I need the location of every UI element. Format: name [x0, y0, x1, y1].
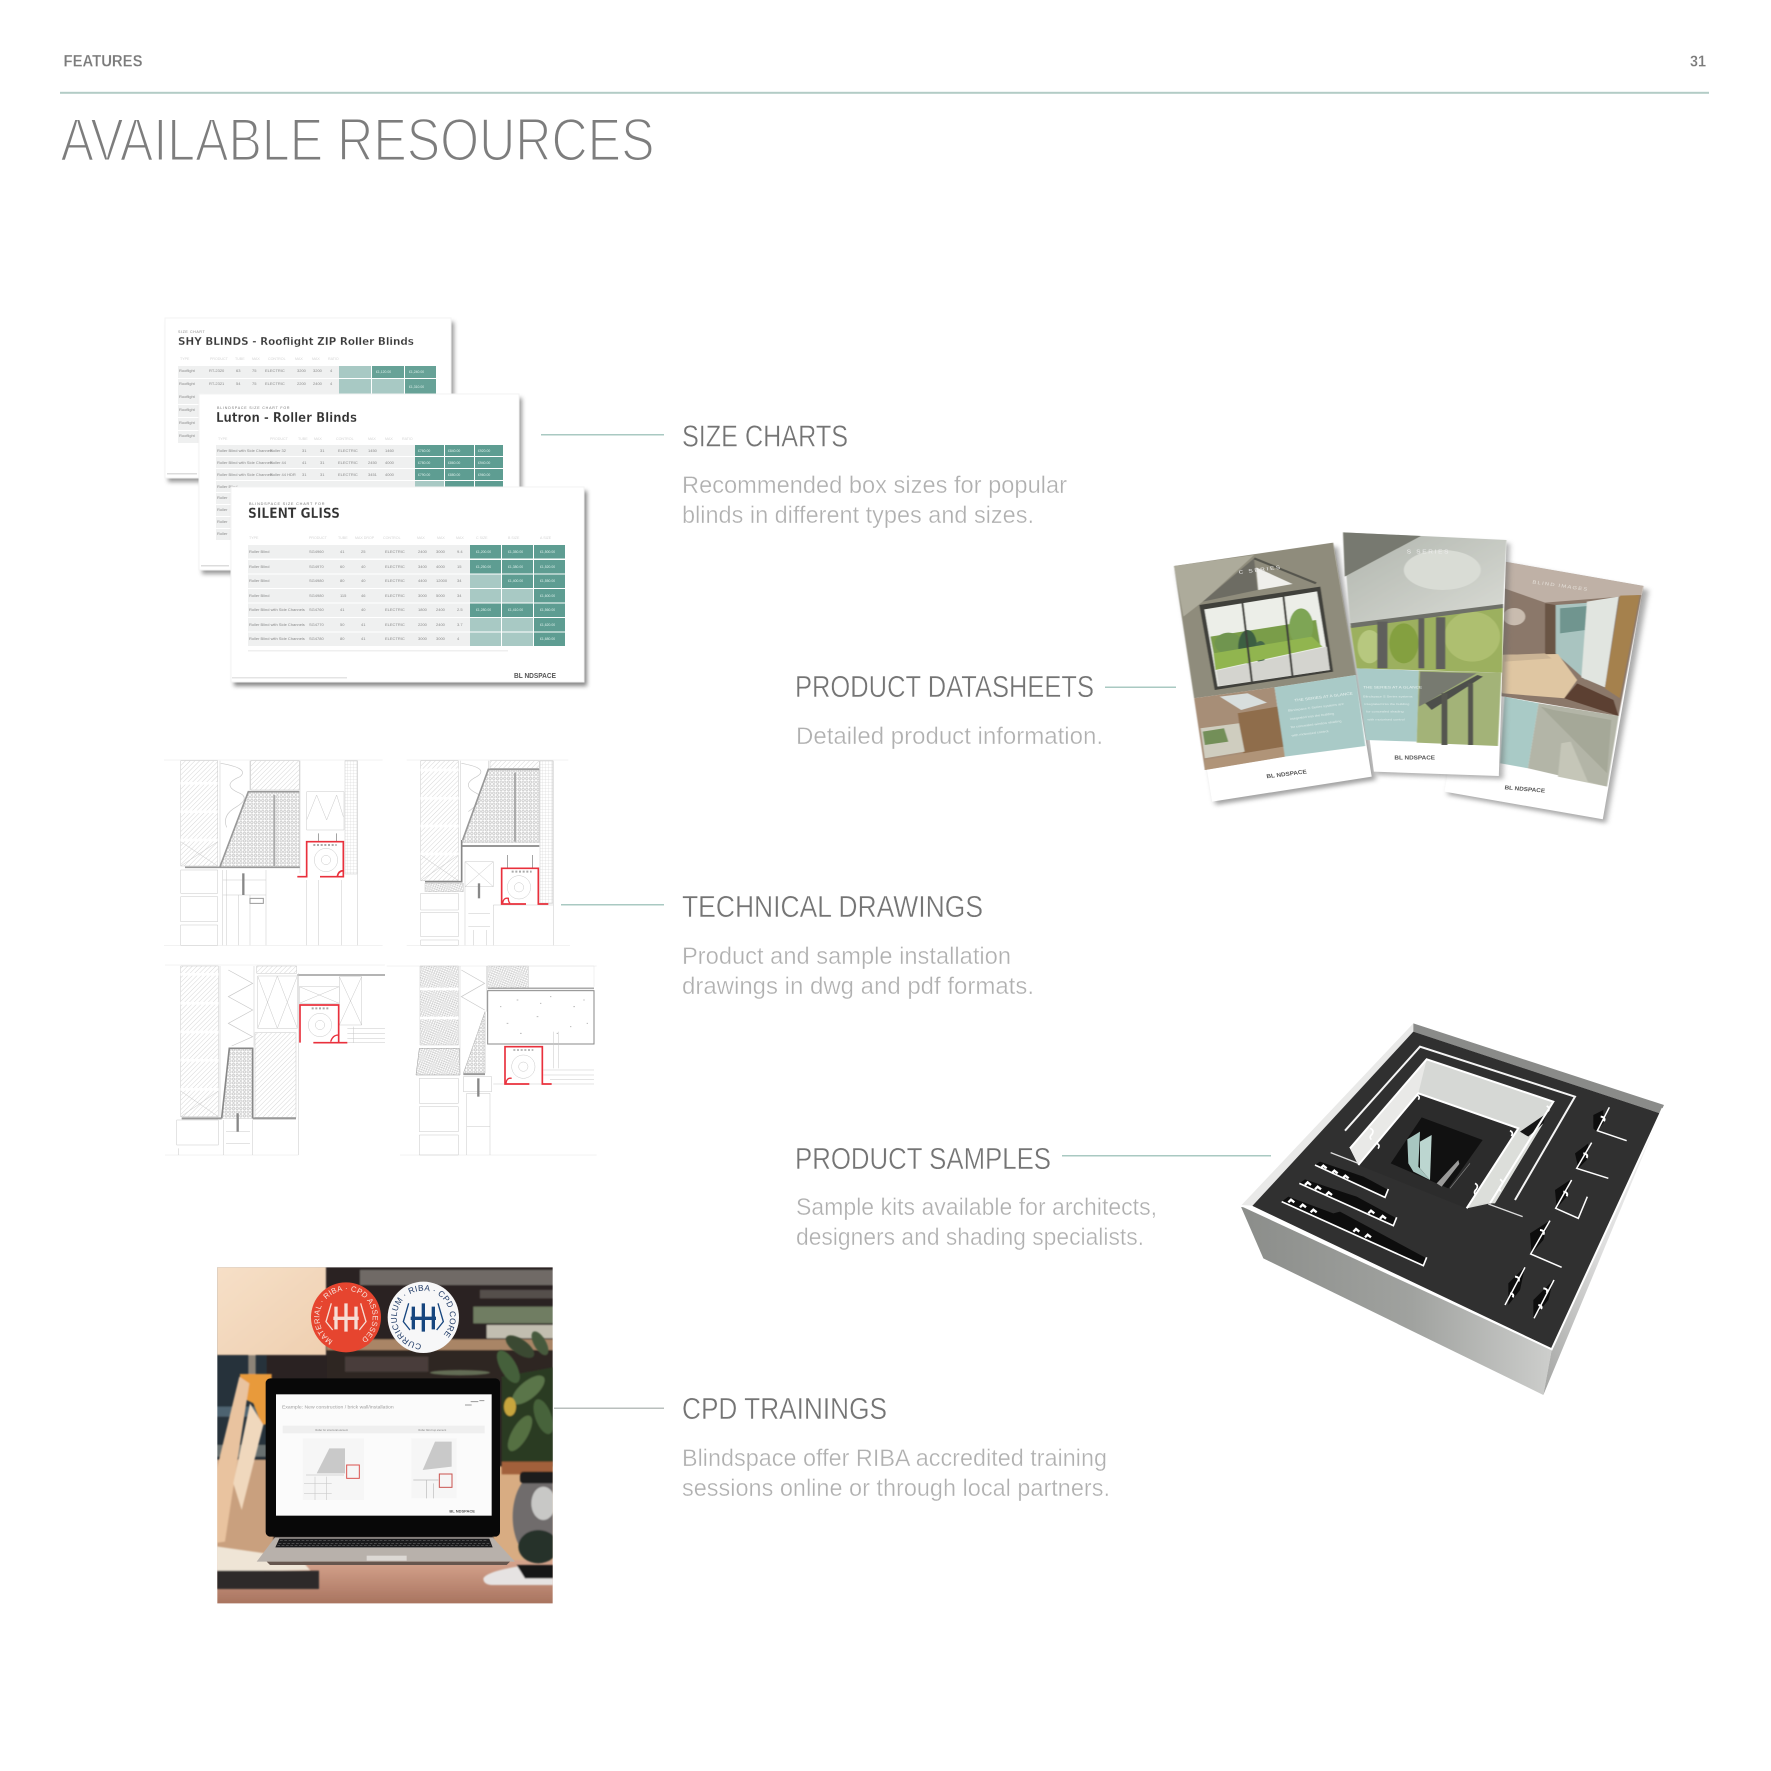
- callout: size charts: SIZE CHARTS: [682, 420, 848, 454]
- datasheet: C series: for concealed window shading: [1290, 719, 1342, 729]
- chart sheet: Silent Gliss: £1,520.00: [540, 565, 555, 569]
- chart sheet: Silent Gliss: C SIZE: [476, 536, 488, 540]
- chart sheet: Lutron: RATIO: [402, 437, 413, 441]
- laptop: BL NDSPACE: [449, 1509, 475, 1514]
- datasheet: S series: THE SERIES AT A GLANCE: [1363, 685, 1422, 689]
- chart sheet: Shy Blinds: PRODUCT: [210, 357, 229, 361]
- chart sheet: Silent Gliss: 2400: [436, 607, 446, 612]
- chart sheet: Silent Gliss: 4: [457, 636, 460, 641]
- chart sheet: Silent Gliss: SG4970: [309, 564, 324, 569]
- chart sheet: Lutron: MAX: [314, 437, 322, 441]
- chart sheet: Silent Gliss: 25: [361, 549, 366, 554]
- callout: CPD trainings: sessions online or through local partners.: [682, 1475, 1110, 1502]
- chart sheet: Silent Gliss: 3.7: [457, 622, 463, 627]
- chart sheet: Silent Gliss: 40: [361, 607, 366, 612]
- chart sheet: Silent Gliss: 3400: [418, 564, 428, 569]
- chart sheet: Silent Gliss: Roller Blind: [249, 564, 269, 569]
- chart sheet: Shy Blinds: CONTROL: [268, 357, 286, 361]
- callout: CPD trainings: [682, 1393, 1110, 1502]
- chart sheet: Lutron: MAX: [368, 437, 376, 441]
- chart sheet: Lutron: ELECTRIC: [338, 472, 358, 477]
- callout: product datasheets: PRODUCT DATASHEETS: [795, 671, 1094, 704]
- chart sheet: Shy Blinds: Rooflight: [179, 420, 196, 425]
- chart sheet: Silent Gliss: 46: [361, 593, 366, 598]
- chart sheet: Silent Gliss: ELECTRIC: [385, 549, 405, 554]
- drawing 1: lintel detail: [164, 760, 383, 945]
- chart sheet: Silent Gliss: ELECTRIC: [385, 564, 405, 569]
- chart sheet: Shy Blinds: 4: [330, 381, 333, 386]
- callout: size charts: Recommended box sizes for popular: [682, 472, 1067, 499]
- chart sheet: Lutron: PRODUCT: [270, 437, 289, 441]
- chart sheet: Lutron: ELECTRIC: [338, 448, 358, 453]
- chart sheet: Shy Blinds: SIZE CHART: [178, 330, 206, 334]
- datasheet: C series: integrated into the building: [1289, 712, 1335, 721]
- callout: technical drawings: drawings in dwg and pdf formats.: [682, 973, 1034, 1000]
- chart sheet: Shy Blinds: TUBE: [235, 357, 245, 361]
- technical drawings group: [164, 760, 597, 1155]
- datasheet: blinds sheet back: BL NDSPACE: [1504, 785, 1546, 794]
- chart sheet: Lutron: Roller 32: [270, 448, 287, 453]
- datasheet: blinds sheet back: BLIND IMAGES: [1532, 580, 1588, 593]
- plant and vase: [430, 1330, 553, 1586]
- chart sheet: Lutron: 4000: [385, 472, 395, 477]
- chart sheet: Silent Gliss: £1,250.00: [476, 565, 491, 569]
- chart sheet: Silent Gliss: 2.5: [457, 607, 463, 612]
- chart sheet: Lutron: Roller: [217, 495, 228, 500]
- chart sheet: Lutron: MAX: [385, 437, 393, 441]
- chart sheet: Silent Gliss: SG4760: [309, 607, 324, 612]
- chart sheet: Silent Gliss: Roller Blind with Side Channels: [249, 636, 305, 641]
- chart sheet: Silent Gliss: SILENT GLISS: [248, 506, 340, 522]
- photo background: [213, 1263, 557, 1607]
- chart sheet: Lutron: 31: [320, 472, 325, 477]
- chart sheet: Lutron: 1450: [368, 448, 378, 453]
- chart sheet: Lutron: Roller: [217, 507, 228, 512]
- chart sheet: Silent Gliss: SG4770: [309, 622, 324, 627]
- chart sheet: Silent Gliss: 80: [340, 578, 345, 583]
- chart sheet: Lutron: £840.00: [448, 449, 460, 453]
- chart sheet: Silent Gliss: 5000: [436, 593, 446, 598]
- chart sheet: Silent Gliss: ELECTRIC: [385, 607, 405, 612]
- callout: technical drawings: TECHNICAL DRAWINGS: [682, 891, 983, 924]
- chart sheet: Silent Gliss: 40: [361, 578, 366, 583]
- chart sheet: Silent Gliss: [231, 487, 587, 686]
- laptop: [257, 1378, 515, 1565]
- chart sheet: Shy Blinds: 3200: [297, 368, 307, 373]
- CPD training photo: [217, 1267, 553, 1604]
- small corner profiles: [1505, 1107, 1627, 1318]
- chart sheet: Shy Blinds: £1,120.00: [376, 370, 391, 374]
- long comb profiles: [1282, 1162, 1427, 1266]
- chart sheet: Lutron: Roller Blind with Side Channels: [217, 448, 273, 453]
- chart sheet: Silent Gliss: 3000: [436, 549, 446, 554]
- chart sheet: Shy Blinds: 75: [252, 368, 257, 373]
- chart sheet: Shy Blinds: 54: [236, 381, 241, 386]
- chart sheet: Silent Gliss: 34: [457, 593, 462, 598]
- chart sheet: Shy Blinds: ELECTRIC: [265, 368, 285, 373]
- chart sheet: Lutron: ELECTRIC: [338, 460, 358, 465]
- datasheet: S series: S SERIES: [1407, 550, 1450, 555]
- chart sheet: Silent Gliss: £1,380.00: [508, 565, 523, 569]
- chart sheet: Lutron: £760.00: [418, 449, 430, 453]
- chart sheet: Shy Blinds: 2200: [297, 381, 307, 386]
- chart sheet: Lutron: Roller 44: [270, 460, 287, 465]
- chart sheet: Shy Blinds: Rooflight: [179, 433, 196, 438]
- drawing 3: head detail: [165, 965, 385, 1155]
- chart sheet: Lutron: £790.00: [418, 473, 430, 477]
- chart sheet: Silent Gliss: 3000: [436, 636, 446, 641]
- datasheet: C series: with motorised control: [1291, 729, 1329, 737]
- chart sheet: Shy Blinds: MAX: [252, 357, 260, 361]
- chart sheet: Silent Gliss: 2200: [418, 622, 428, 627]
- chart sheet: Lutron: 41: [302, 460, 307, 465]
- chart sheet: Lutron: TUBE: [298, 437, 308, 441]
- foam tray: [1252, 1032, 1660, 1348]
- chart sheet: Silent Gliss: PRODUCT: [309, 536, 328, 540]
- callout: product samples: [795, 1143, 1157, 1251]
- panel: size charts stack: [165, 318, 587, 686]
- chart sheet: Lutron: £960.00: [478, 473, 490, 477]
- chart sheet: Silent Gliss: 34: [457, 578, 462, 583]
- chart sheet: Silent Gliss: Roller Blind with Side Channels: [249, 622, 305, 627]
- chart sheet: Lutron: £880.00: [448, 473, 460, 477]
- callout: size charts: blinds in different types and sizes.: [682, 502, 1034, 529]
- datasheet: S series: integrated into the building: [1364, 702, 1410, 706]
- laptop: Roller blind top element: [418, 1428, 446, 1432]
- chart sheet: Lutron: Roller Blind with Side Channels: [217, 472, 273, 477]
- chart sheet: Silent Gliss: 1800: [418, 607, 428, 612]
- chart sheet: Lutron: 4000: [385, 460, 395, 465]
- chart sheet: Silent Gliss: £1,200.00: [476, 550, 491, 554]
- chart sheet: Silent Gliss: £1,560.00: [540, 608, 555, 612]
- chart sheet: Silent Gliss: Roller Blind: [249, 549, 269, 554]
- chart sheet: Silent Gliss: BL NDSPACE: [514, 673, 556, 680]
- chart sheet: Silent Gliss: Roller Blind: [249, 578, 269, 583]
- chart sheet: Silent Gliss: £1,280.00: [476, 608, 491, 612]
- chart sheet: Shy Blinds: £1,240.00: [409, 370, 424, 374]
- chart sheet: Silent Gliss: 41: [361, 636, 366, 641]
- chart sheet: Lutron: 31: [302, 448, 307, 453]
- chart sheet: Silent Gliss: MAX: [456, 536, 464, 540]
- chart sheet: Silent Gliss: £1,620.00: [540, 623, 555, 627]
- laptop: Example: New construction / brick wall/installation: [282, 1404, 394, 1410]
- chart sheet: Shy Blinds: SHY BLINDS - Rooflight ZIP Roller Blinds: [178, 335, 414, 348]
- chart sheet: Lutron: £780.00: [418, 461, 430, 465]
- chart sheet: Lutron: Roller: [217, 531, 228, 536]
- chart sheet: Silent Gliss: SG4980: [309, 578, 324, 583]
- datasheet: C series: [1174, 543, 1376, 805]
- chart sheet: Silent Gliss: 4400: [418, 578, 428, 583]
- chart sheet: Lutron: CONTROL: [336, 437, 354, 441]
- chart sheet: Silent Gliss: CONTROL: [383, 536, 401, 540]
- datasheet: S series: Blindspace S Series systems: [1363, 695, 1413, 698]
- chart sheet: Shy Blinds: [165, 318, 454, 482]
- callout: product samples: Sample kits available for architects,: [796, 1194, 1157, 1221]
- datasheets fan: [1174, 532, 1649, 823]
- chart sheet: Lutron: Roller 44 HDR: [270, 472, 296, 477]
- chart sheet: Shy Blinds: 2400: [313, 381, 323, 386]
- chart sheet: Lutron: £860.00: [448, 461, 460, 465]
- callout: technical drawings: Product and sample installation: [682, 943, 1011, 970]
- chart sheet: Silent Gliss: Roller Blind: [249, 593, 269, 598]
- chart sheet: Silent Gliss: £1,680.00: [540, 637, 555, 641]
- datasheet: C series: BL NDSPACE: [1266, 769, 1308, 780]
- chart sheet: Lutron: £920.00: [478, 449, 490, 453]
- chart sheet: Lutron: 1460: [385, 448, 395, 453]
- page header label: FEATURES: [64, 52, 142, 71]
- product sample box: [1241, 1023, 1664, 1395]
- chart sheet: Shy Blinds: Rooflight: [179, 381, 196, 386]
- cavity with frame profiles: [1331, 1047, 1575, 1217]
- chart sheet: Silent Gliss: B SIZE: [508, 536, 520, 540]
- chart sheet: Silent Gliss: £1,350.00: [508, 550, 523, 554]
- chart sheet: Lutron: TYPE: [218, 437, 228, 441]
- chart sheet: Shy Blinds: Rooflight: [179, 394, 196, 399]
- datasheet: S series: for concealed shading: [1366, 710, 1404, 714]
- chart sheet: Silent Gliss: TYPE: [249, 536, 259, 540]
- callout: product datasheets: Detailed product information.: [796, 723, 1103, 750]
- chart sheet: Lutron: Lutron - Roller Blinds: [216, 411, 357, 426]
- callout: CPD trainings: CPD TRAININGS: [682, 1393, 887, 1426]
- chart sheet: Lutron: Roller: [217, 519, 228, 524]
- callout: product samples: PRODUCT SAMPLES: [795, 1143, 1051, 1176]
- chart sheet: Lutron: Roller Blind: [217, 484, 237, 489]
- box walls: [1241, 1023, 1664, 1395]
- chart sheet: Silent Gliss: 80: [340, 636, 345, 641]
- chart sheet: Silent Gliss: A SIZE: [540, 536, 552, 540]
- chart sheet: Shy Blinds: RT-2320: [209, 368, 225, 373]
- datasheet: C series: THE SERIES AT A GLANCE: [1294, 691, 1353, 703]
- chart sheet: Shy Blinds: 3200: [313, 368, 323, 373]
- chart sheet: Silent Gliss: 41: [361, 622, 366, 627]
- chart sheet: Silent Gliss: £1,550.00: [540, 579, 555, 583]
- chart sheet: Silent Gliss: ELECTRIC: [385, 622, 405, 627]
- chart sheet: Silent Gliss: 3000: [418, 593, 428, 598]
- chart sheet: Silent Gliss: ELECTRIC: [385, 636, 405, 641]
- callout: product samples: designers and shading specialists.: [796, 1224, 1144, 1251]
- chart sheet: Lutron: £940.00: [478, 461, 490, 465]
- chart sheet: Silent Gliss: £1,600.00: [540, 594, 555, 598]
- badge: RIBA assessed material: MATERIAL · RIBA · CPD ASSESSED: [314, 1286, 378, 1345]
- drawing 2: lintel detail with spacer: [407, 760, 570, 945]
- chart sheet: Silent Gliss: 41: [340, 549, 345, 554]
- callout: size charts: [682, 420, 1067, 529]
- chart sheet: Lutron: 31: [320, 460, 325, 465]
- chart sheet: Shy Blinds: 75: [252, 381, 257, 386]
- drawing 4: concrete slab detail: [387, 966, 597, 1155]
- chart sheet: Silent Gliss: 50: [340, 622, 345, 627]
- table lamp: [213, 1263, 326, 1589]
- datasheet: C series: Blindspace C Series systems are: [1288, 702, 1344, 713]
- badge: RIBA core curriculum: CURRICULUM · RIBA · CPD CORE: [390, 1285, 456, 1350]
- chart sheet: Silent Gliss: 3000: [418, 636, 428, 641]
- chart sheet: Shy Blinds: 63: [236, 368, 241, 373]
- chart sheet: Silent Gliss: 40: [361, 564, 366, 569]
- chart sheet: Shy Blinds: ELECTRIC: [265, 381, 285, 386]
- chart sheet: Lutron: 3451: [368, 472, 378, 477]
- datasheet: S series: BL NDSPACE: [1394, 755, 1436, 761]
- datasheet: S series: [1343, 532, 1510, 779]
- datasheet: C series: C SERIES: [1238, 565, 1283, 576]
- chart sheet: Silent Gliss: 4000: [436, 564, 446, 569]
- chart sheet: Lutron: 31: [320, 448, 325, 453]
- chart sheet: Lutron: 2450: [368, 460, 378, 465]
- chart sheet: Silent Gliss: MAX: [437, 536, 445, 540]
- chart sheet: Silent Gliss: £1,400.00: [508, 579, 523, 583]
- chart sheet: Shy Blinds: MAX: [295, 357, 303, 361]
- chart sheet: Silent Gliss: 60: [340, 564, 345, 569]
- chart sheet: Shy Blinds: TYPE: [180, 357, 190, 361]
- chart sheet: Shy Blinds: RT-2321: [209, 381, 225, 386]
- chart sheet: Silent Gliss: ELECTRIC: [385, 578, 405, 583]
- chart sheet: Silent Gliss: MAX DROP: [355, 536, 375, 540]
- chart sheet: Silent Gliss: SG4960: [309, 549, 324, 554]
- laptop: Roller for structural element: [315, 1428, 348, 1432]
- chart sheet: Silent Gliss: £1,500.00: [540, 550, 555, 554]
- chart sheet: Silent Gliss: Roller Blind with Side Channels: [249, 607, 305, 612]
- chart sheet: Lutron: 31: [302, 472, 307, 477]
- callout: product datasheets: [795, 671, 1103, 750]
- chart sheet: Silent Gliss: 2400: [436, 622, 446, 627]
- chart sheet: Lutron: [199, 394, 522, 574]
- chart sheet: Silent Gliss: 2400: [418, 549, 428, 554]
- callout: technical drawings: [682, 891, 1034, 1000]
- chart sheet: Silent Gliss: 115: [340, 593, 347, 598]
- datasheet: blinds sheet back: [1444, 558, 1649, 823]
- chart sheet: Lutron: Roller Blind with Side Channels: [217, 460, 273, 465]
- chart sheet: Silent Gliss: TUBE: [338, 536, 348, 540]
- chart sheet: Silent Gliss: SG4780: [309, 636, 324, 641]
- page number: 31: [1690, 54, 1706, 71]
- callout: CPD trainings: Blindspace offer RIBA accredited training: [682, 1445, 1107, 1472]
- chart sheet: Shy Blinds: 4: [330, 368, 333, 373]
- chart sheet: Silent Gliss: BLINDSPACE SIZE CHART FOR: [249, 502, 325, 506]
- datasheet: S series: with motorised control: [1367, 718, 1405, 721]
- chart sheet: Shy Blinds: £1,310.00: [409, 385, 424, 389]
- chart sheet: Shy Blinds: MAX: [312, 357, 320, 361]
- chart sheet: Lutron: BLINDSPACE SIZE CHART FOR: [217, 406, 290, 410]
- chart sheet: Shy Blinds: Rooflight: [179, 368, 196, 373]
- title: AVAILABLE RESOURCES: [60, 106, 654, 174]
- chart sheet: Shy Blinds: RATIO: [328, 357, 339, 361]
- chart sheet: Silent Gliss: 12000: [436, 578, 448, 583]
- chart sheet: Silent Gliss: 9.4: [457, 549, 463, 554]
- chart sheet: Shy Blinds: Rooflight: [179, 407, 196, 412]
- chart sheet: Silent Gliss: £1,410.00: [508, 608, 523, 612]
- chart sheet: Silent Gliss: ELECTRIC: [385, 593, 405, 598]
- chart sheet: Silent Gliss: MAX: [417, 536, 425, 540]
- chart sheet: Silent Gliss: 41: [340, 607, 345, 612]
- chart sheet: Silent Gliss: SG4980: [309, 593, 324, 598]
- chart sheet: Silent Gliss: 15: [457, 564, 462, 569]
